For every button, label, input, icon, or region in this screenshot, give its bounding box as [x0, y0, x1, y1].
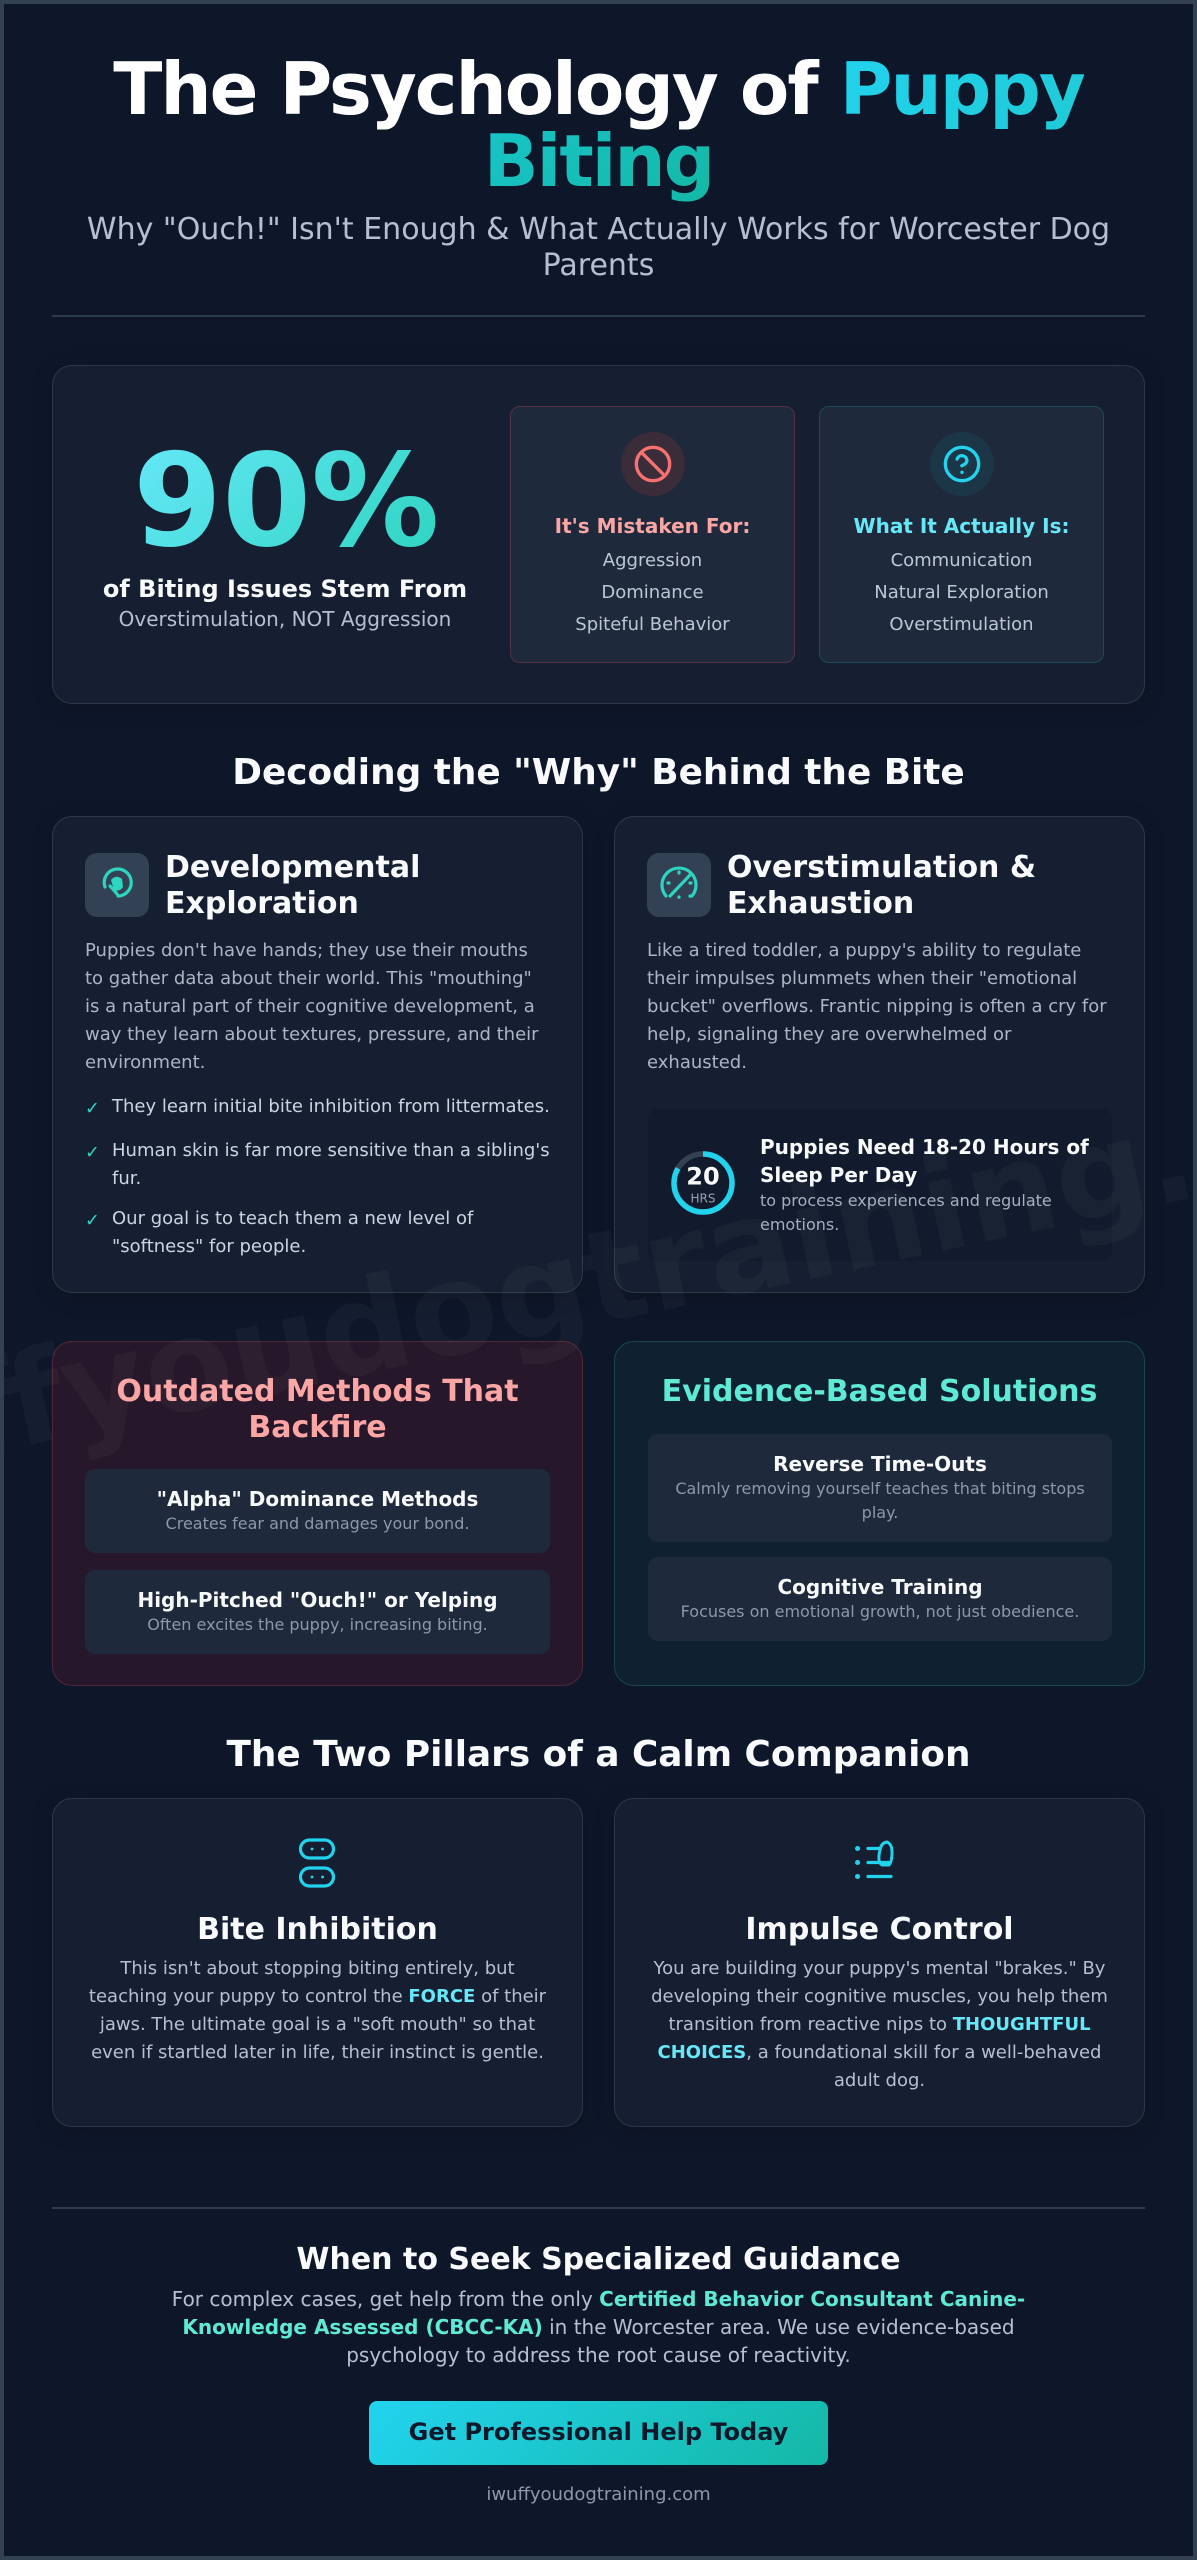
training description: Focuses on emotional growth, not just obedience.	[681, 1602, 1079, 1621]
paragraph: mouths: is a natural part of their cognitive development, a	[85, 996, 535, 1017]
solution description: Calmly removing yourself teaches that biting stops	[675, 1479, 1085, 1498]
paragraph: bite inhibition	[89, 1958, 546, 2063]
caption heading: of Biting Issues Stem From	[103, 575, 467, 603]
paragraph: bite inhibition: even if startled later in life, their instinct is gentle.	[91, 2042, 544, 2063]
footer divider	[52, 2207, 1145, 2209]
sleep subtext	[760, 1191, 1052, 1234]
solution description: play.	[862, 1503, 898, 1522]
heading: outdated methods: Outdated Methods That	[116, 1374, 519, 1409]
list: mistaken items	[575, 550, 730, 635]
ouch description: Often excites the puppy, increasing biting.	[147, 1615, 488, 1634]
heading: overstimulation: Exhaustion	[727, 886, 914, 921]
list: actual items	[874, 550, 1049, 635]
heading: outdated methods	[116, 1374, 519, 1445]
list: actual items: Natural Exploration	[874, 582, 1049, 603]
sleep subtext: to process experiences and regulate	[760, 1191, 1052, 1210]
heading: outdated methods: Backfire	[248, 1410, 387, 1445]
paragraph: toddler: their impulses plummets when their "emotional	[647, 968, 1077, 989]
method: ouch	[85, 1570, 550, 1654]
heading: guidance: When to Seek Specialized Guidance	[296, 2242, 901, 2277]
header divider	[52, 315, 1145, 317]
ouch title: High-Pitched "Ouch!" or Yelping	[137, 1588, 498, 1612]
heading: developmental	[165, 850, 420, 921]
panel: what it actually is	[819, 406, 1104, 663]
sleep headline: Sleep Per Day	[760, 1163, 917, 1187]
paragraph: guidance	[172, 2287, 1025, 2367]
list: actual items: Communication	[891, 550, 1032, 571]
sleep text	[760, 1135, 1089, 1234]
paragraph: impulse control: You are building your puppy's mental "brakes." By	[654, 1958, 1105, 1979]
paragraph: bite inhibition: teaching your puppy to control the FORCE of their	[89, 1986, 546, 2007]
panel: bite inhibition	[52, 1798, 583, 2127]
method description: Creates fear and damages your bond.	[166, 1514, 469, 1533]
sleep ring: 20	[686, 1162, 720, 1190]
panel: developmental exploration	[52, 816, 583, 1293]
solution: reverse time-outs	[648, 1434, 1112, 1542]
title: Biting	[484, 119, 713, 203]
sleep subtext: emotions.	[760, 1215, 839, 1234]
paragraph: impulse control: adult dog.	[834, 2070, 925, 2091]
heading: mistaken for: It's Mistaken For:	[555, 514, 750, 538]
paragraph: mouths: to gather data about their world. This "mouthing"	[85, 968, 532, 989]
panel: outdated methods	[52, 1341, 583, 1686]
section heading: two pillars: The Two Pillars of a Calm Companion	[226, 1734, 970, 1775]
subtitle: Parents	[543, 248, 654, 283]
paragraph: toddler: bucket" overflows. Frantic nipping is often a cry for	[647, 996, 1107, 1017]
paragraph: toddler	[647, 940, 1107, 1073]
paragraph: guidance: psychology to address the root cause of reactivity.	[346, 2343, 851, 2367]
check item 1: ✓	[85, 1099, 100, 1119]
panel: 90 percent stat	[52, 365, 1145, 704]
call to action section	[172, 2242, 1025, 2505]
paragraph: impulse control: CHOICES, a foundational skill for a well-behaved	[658, 2042, 1101, 2063]
paragraph: impulse control	[651, 1958, 1108, 2091]
paragraph: mouths: way they learn about textures, pressure, and their	[85, 1024, 539, 1045]
paragraph: toddler: Like a tired toddler, a puppy's ability to regulate	[647, 940, 1081, 961]
sleep ring: HRS	[691, 1192, 715, 1206]
icon: exploration	[85, 853, 149, 917]
heading: what it is: What It Actually Is:	[854, 514, 1069, 538]
panel: evidence-based solutions	[614, 1341, 1145, 1686]
heading: developmental: Developmental	[165, 850, 420, 885]
icon: impulse	[855, 1840, 894, 1879]
panel: overstimulation and exhaustion	[614, 816, 1145, 1293]
paragraph: bite inhibition: jaws. The ultimate goal is a "soft mouth" so that	[100, 2014, 535, 2035]
paragraph: toddler: exhausted.	[647, 1052, 747, 1073]
method: alpha	[85, 1469, 550, 1553]
paragraph: mouths	[85, 940, 539, 1073]
icon: gauge	[647, 853, 711, 917]
solution: cognitive training	[648, 1557, 1112, 1641]
check item 3: "softness" for people.	[112, 1236, 306, 1257]
title	[113, 47, 1084, 203]
check item 2: fur.	[112, 1168, 141, 1189]
callout: sleep	[648, 1109, 1112, 1261]
solution title: Reverse Time-Outs	[773, 1452, 987, 1476]
checklist	[85, 1096, 550, 1257]
paragraph: mouths: environment.	[85, 1052, 205, 1073]
header	[52, 47, 1145, 317]
heading: developmental: Exploration	[165, 886, 359, 921]
check item 2: ✓	[85, 1143, 100, 1163]
check item 2	[85, 1140, 550, 1189]
check item 2: Human skin is far more sensitive than a sibling's	[112, 1140, 550, 1161]
heading: overstimulation	[727, 850, 1036, 921]
check item 3	[85, 1208, 474, 1257]
heading: impulse control: Impulse Control	[745, 1912, 1014, 1947]
check item 3: ✓	[85, 1211, 100, 1231]
icon: question	[930, 432, 994, 496]
heading: overstimulation: Overstimulation &	[727, 850, 1036, 885]
title: The Psychology of Puppy	[113, 47, 1084, 131]
panel: impulse control	[614, 1798, 1145, 2127]
paragraph: impulse control: developing their cognitive muscles, you help them	[651, 1986, 1108, 2007]
list: mistaken items: Dominance	[601, 582, 704, 603]
heading: evidence-based: Evidence-Based Solutions	[662, 1374, 1097, 1409]
stat number: 90%	[133, 427, 439, 576]
heading: bite inhibition: Bite Inhibition	[197, 1912, 438, 1947]
list: mistaken items: Spiteful Behavior	[575, 614, 730, 635]
check item 1: They learn initial bite inhibition from littermates.	[112, 1096, 550, 1117]
caption subtext: Overstimulation, NOT Aggression	[119, 607, 451, 631]
button: get help	[369, 2401, 828, 2465]
sleep ring	[671, 1151, 735, 1215]
icon: ban	[621, 432, 685, 496]
method title: "Alpha" Dominance Methods	[157, 1487, 478, 1511]
icon: bite	[298, 1838, 336, 1888]
sleep headline: Puppies Need 18-20 Hours of	[760, 1135, 1089, 1159]
paragraph: impulse control: transition from reactive nips to THOUGHTFUL	[668, 2014, 1091, 2035]
check item 3: Our goal is to teach them a new level of	[112, 1208, 473, 1229]
paragraph: guidance: For complex cases, get help from the only Certified Behavior Consultant Canine-	[172, 2287, 1025, 2311]
subtitle: Why "Ouch!" Isn't Enough & What Actually Works for Worcester Dog	[87, 212, 1110, 247]
panel: mistaken for	[510, 406, 795, 663]
solution description	[675, 1479, 1085, 1522]
paragraph: toddler: help, signaling they are overwhelmed or	[647, 1024, 1011, 1045]
paragraph: bite inhibition: This isn't about stopping biting entirely, but	[120, 1958, 515, 1979]
subtitle	[87, 212, 1110, 283]
paragraph: guidance: Knowledge Assessed (CBCC-KA) in the Worcester area. We use evidence-based	[182, 2315, 1015, 2339]
list: mistaken items: Aggression	[603, 550, 702, 571]
training title: Cognitive Training	[777, 1575, 983, 1599]
button: get help: Get Professional Help Today	[409, 2418, 788, 2446]
stat caption	[103, 575, 467, 631]
paragraph: mouths: Puppies don't have hands; they use their mouths	[85, 940, 528, 961]
section heading: decoding: Decoding the "Why" Behind the Bite	[232, 752, 965, 793]
list: actual items: Overstimulation	[889, 614, 1034, 635]
sleep headline	[760, 1135, 1089, 1187]
website: iwuffyoudogtraining.com	[486, 2484, 711, 2505]
